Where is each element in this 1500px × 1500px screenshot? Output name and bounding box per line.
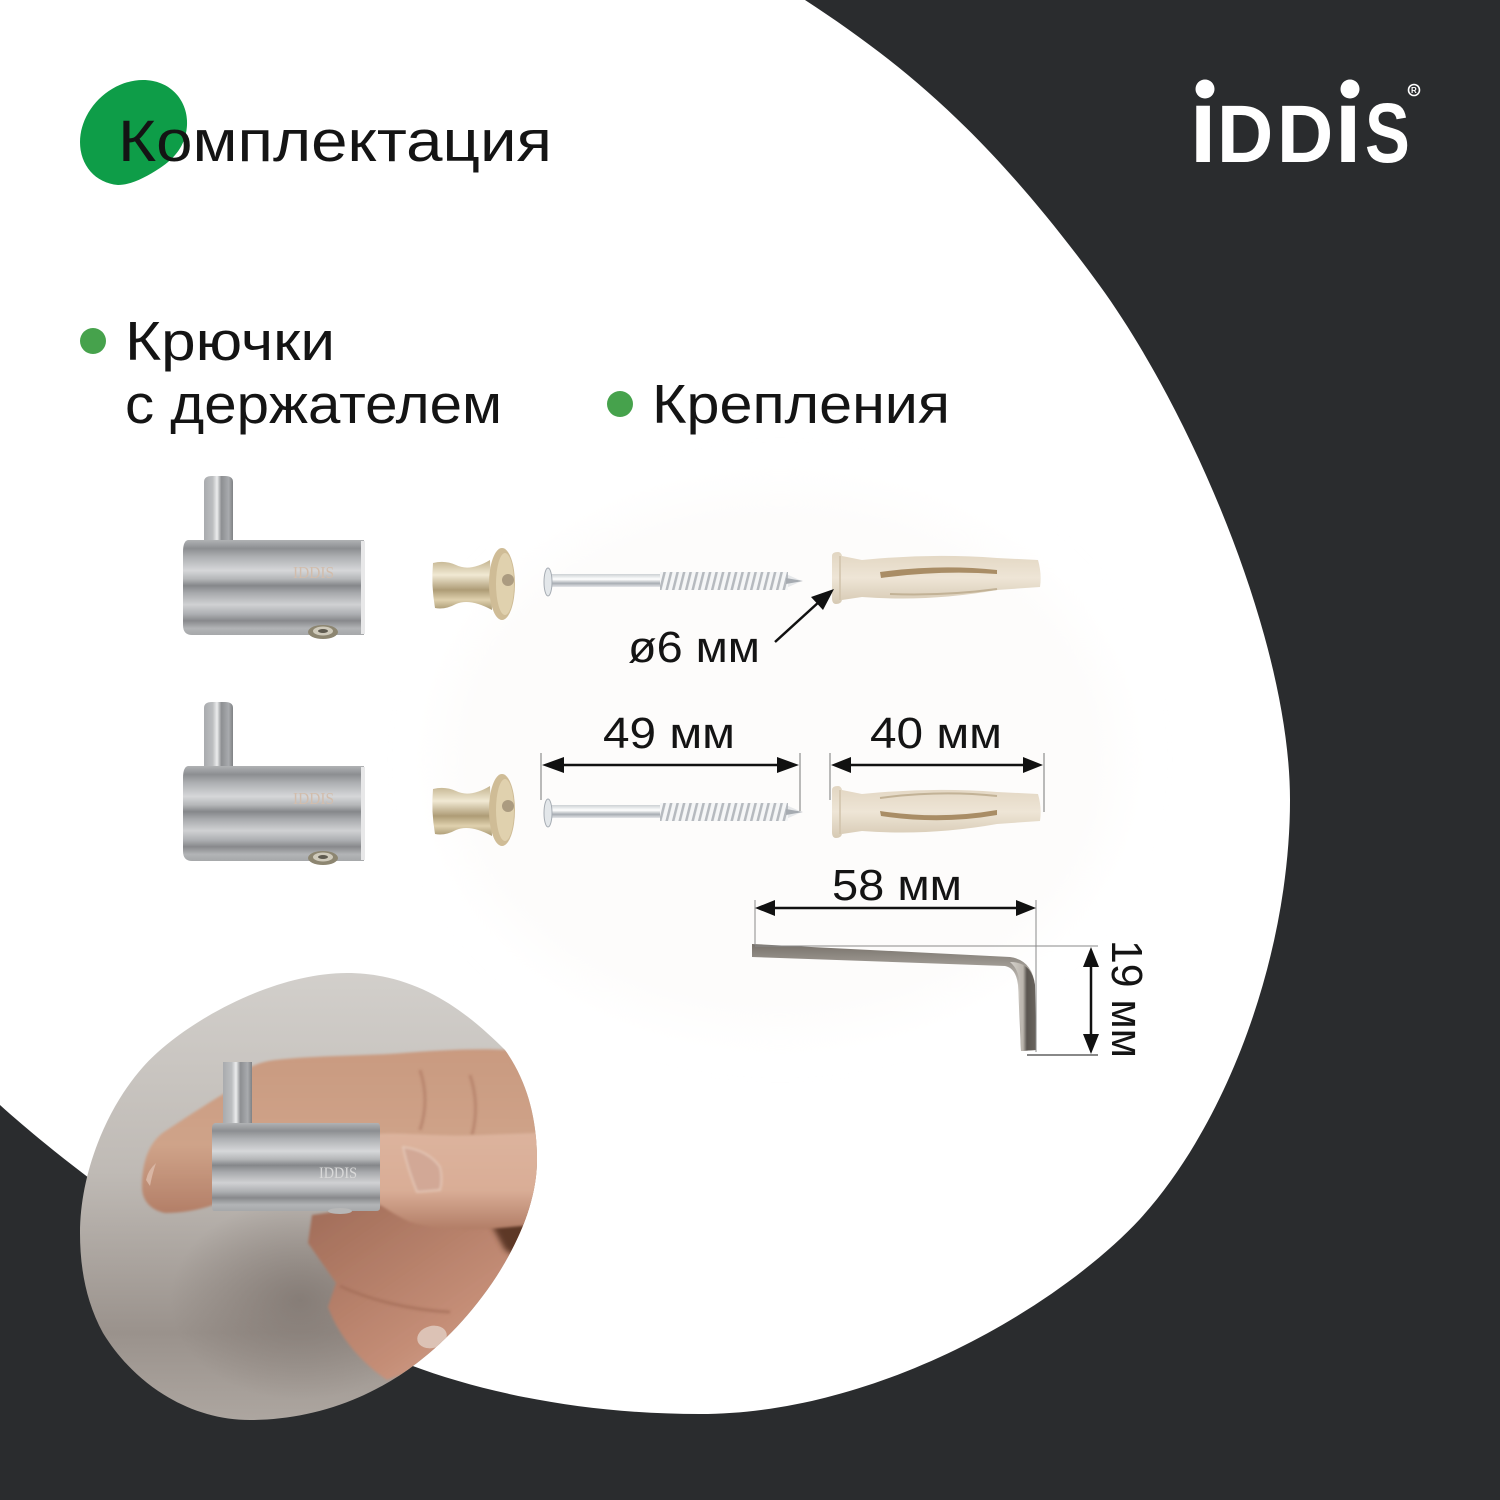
knuckle creases: [420, 1070, 476, 1135]
logo: D: [1217, 88, 1273, 179]
thumb: [380, 1132, 537, 1230]
list item: hooks with holder: [80, 310, 502, 435]
logo: I: [1190, 88, 1216, 180]
dimension: screw 49 mm: 49 мм: [603, 709, 735, 758]
heading: [80, 80, 552, 185]
index finger and back of hand: [142, 1049, 560, 1240]
logo: [1190, 80, 1420, 181]
dimension: key 19 mm: [1027, 940, 1151, 1058]
list item: hooks with holder: с держателем: [125, 373, 502, 435]
icon: green blob: [80, 80, 187, 185]
list item: hooks with holder: Крючки: [125, 310, 335, 372]
hook top: IDDIS: [293, 563, 334, 582]
dimension: dowel 40 mm: 40 мм: [870, 709, 1002, 758]
dimension: key 58 mm: [755, 861, 1098, 1052]
hook in hand: [212, 1062, 380, 1214]
list item: fasteners: Крепления: [652, 373, 950, 435]
dimension: diameter 6 mm: ø6 мм: [628, 623, 760, 672]
dimension: key 19 mm: 19 мм: [1102, 940, 1151, 1058]
hook in hand: IDDIS: [319, 1165, 357, 1182]
hook top: [183, 476, 365, 639]
logo: I: [1335, 88, 1361, 180]
dowel bottom: [832, 786, 1041, 838]
thumb nail: [403, 1147, 442, 1192]
screw bottom: [544, 799, 803, 827]
off-white photo backdrop: [440, 490, 1120, 1030]
dimension: dowel 40 mm: [830, 709, 1044, 812]
logo: R: [1411, 86, 1417, 95]
dimension: key 58 mm: 58 мм: [832, 861, 962, 910]
lower fingers: [307, 1205, 530, 1380]
hook bottom: IDDIS: [293, 789, 334, 808]
logo: D: [1277, 88, 1333, 179]
dowel top: [832, 552, 1041, 604]
anchor bottom: [432, 774, 515, 846]
nail index: [146, 1163, 156, 1186]
title: Комплектация: [118, 109, 552, 174]
anchor top: [432, 548, 515, 620]
hook bottom: [183, 702, 365, 865]
dimension: screw 49 mm: [541, 709, 800, 811]
logo: S: [1365, 87, 1410, 181]
dark gap: [490, 1221, 525, 1256]
photo: hand holding hook: [70, 965, 560, 1425]
hex key: [752, 944, 1036, 1051]
screw top: [544, 568, 803, 596]
dimension: diameter 6 mm: [628, 589, 834, 672]
